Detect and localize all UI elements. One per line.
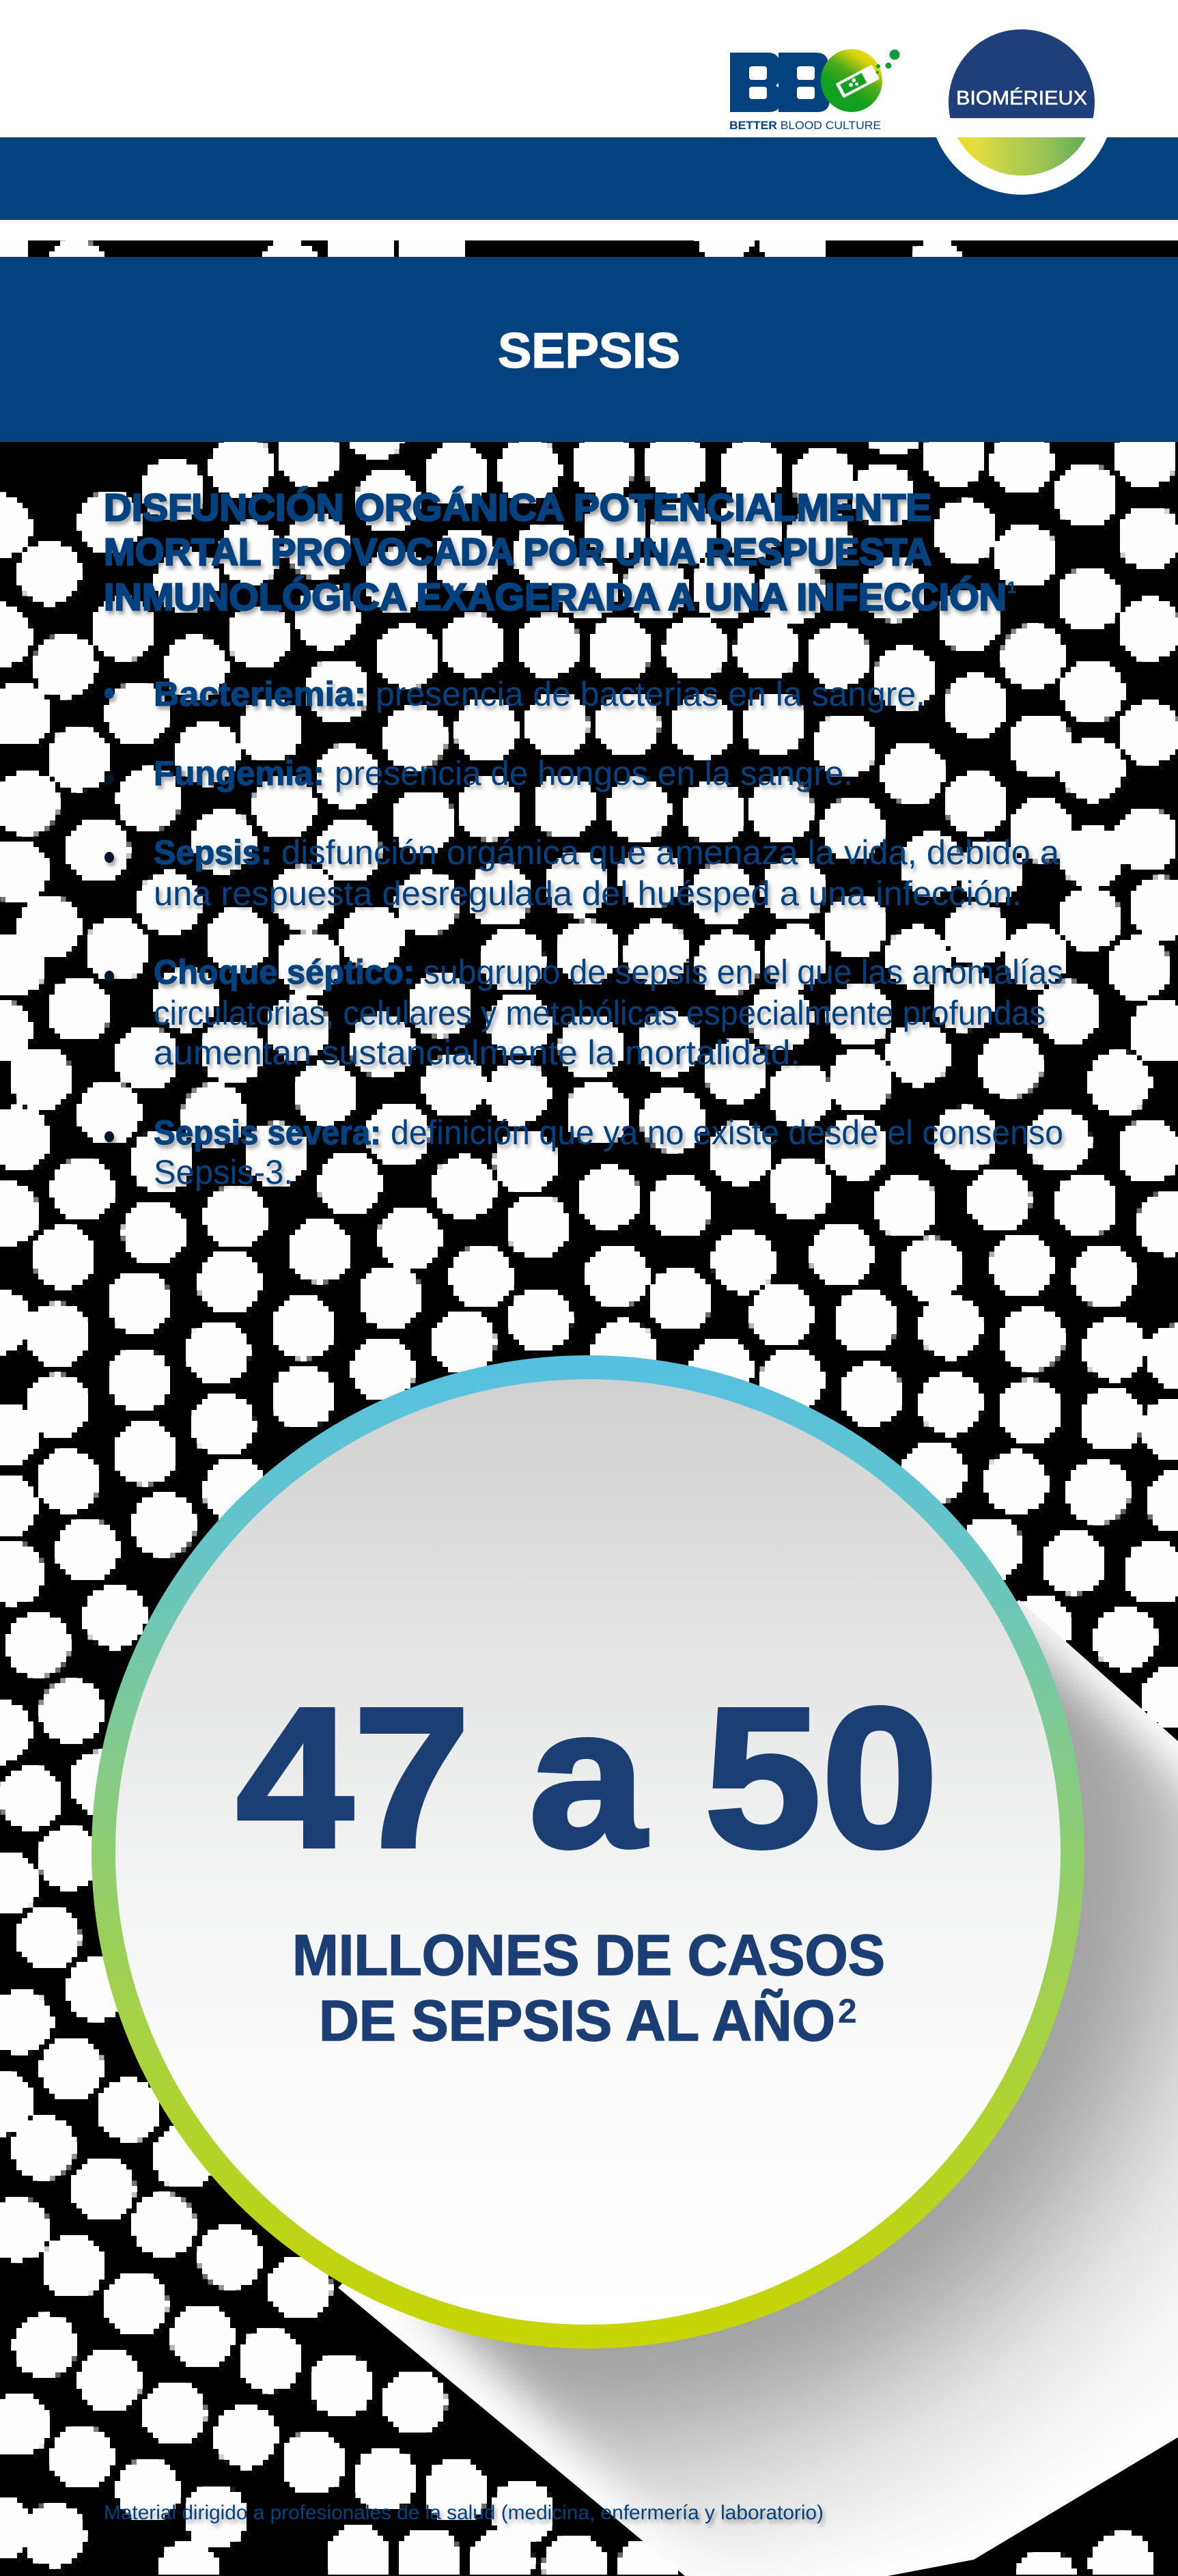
- heading: definition of sepsis: MORTAL PROVOCADA POR UNA RESPUESTA: [104, 530, 931, 573]
- bullet: fungemia: [104, 754, 853, 792]
- heading: definition of sepsis: [104, 486, 1016, 618]
- footer note: Material dirigido a profesionales de la salud (medicina, enfermería y laboratorio): [104, 2502, 824, 2524]
- heading: definition of sepsis: 1: [1007, 579, 1016, 597]
- heading: definition of sepsis: INMUNOLÓGICA EXAGERADA A UNA INFECCIÓN: [104, 575, 1007, 618]
- white separator: [0, 220, 1178, 240]
- bullet: choque septico: [104, 953, 1063, 1072]
- bullet: choque septico: aumentan sustancialmente la mortalidad.: [154, 1034, 800, 1072]
- bullet: sepsis: [104, 833, 1059, 913]
- top white band: [0, 0, 1178, 137]
- big number: 47 a 50: [236, 1666, 938, 1889]
- bullet: sepsis severa: [104, 1113, 1063, 1191]
- bullet: sepsis severa: Sepsis-3.: [154, 1153, 293, 1191]
- caption line 1: MILLONES DE CASOS: [292, 1923, 885, 1987]
- bullet: sepsis severa: Sepsis severa:: [154, 1113, 381, 1152]
- bullet: choque septico: subgrupo de sepsis en el que las anomalías: [423, 953, 1063, 991]
- bullet: sepsis: Sepsis:: [154, 833, 272, 872]
- bullet: fungemia: Fungemia:: [154, 754, 324, 792]
- title banner: [0, 257, 1178, 442]
- bullet: sepsis: disfunción orgánica que amenaza la vida, debido a: [281, 833, 1059, 872]
- statistic circle: [92, 1355, 1084, 2349]
- navy band: [0, 137, 1178, 220]
- caption superscript: 2: [838, 1992, 857, 2030]
- long drop shadow of the circle: [273, 1571, 1178, 2576]
- title: SEPSIS: [498, 324, 680, 378]
- bullet: sepsis severa: definición que ya no existe desde el consenso: [391, 1113, 1063, 1152]
- bullet: choque septico: circulatorias, celulares y metabólicas especialmente profundas: [154, 994, 1046, 1032]
- bullet: bacteriemia: presencia de bacterias en la sangre.: [376, 675, 925, 713]
- heading: definition of sepsis: DISFUNCIÓN ORGÁNICA POTENCIALMENTE: [104, 486, 931, 529]
- bullet: sepsis: una respuesta desregulada del huésped a una infección.: [154, 874, 1022, 913]
- caption line 2: DE SEPSIS AL AÑO: [319, 1989, 835, 2053]
- bullet: choque septico: Choque séptico:: [154, 953, 415, 991]
- bullet: bacteriemia: [104, 675, 925, 713]
- logo: bioMérieux: [936, 29, 1107, 195]
- bullet: fungemia: presencia de hongos en la sangre.: [335, 754, 853, 792]
- logo tagline: BETTER BLOOD CULTURE: [729, 119, 881, 132]
- definitions list: [104, 675, 1063, 1191]
- bullet: bacteriemia: Bacteriemia:: [154, 675, 366, 713]
- logo: Better Blood Culture: [729, 49, 900, 132]
- logo wordmark: BIOMÉRIEUX: [956, 87, 1087, 109]
